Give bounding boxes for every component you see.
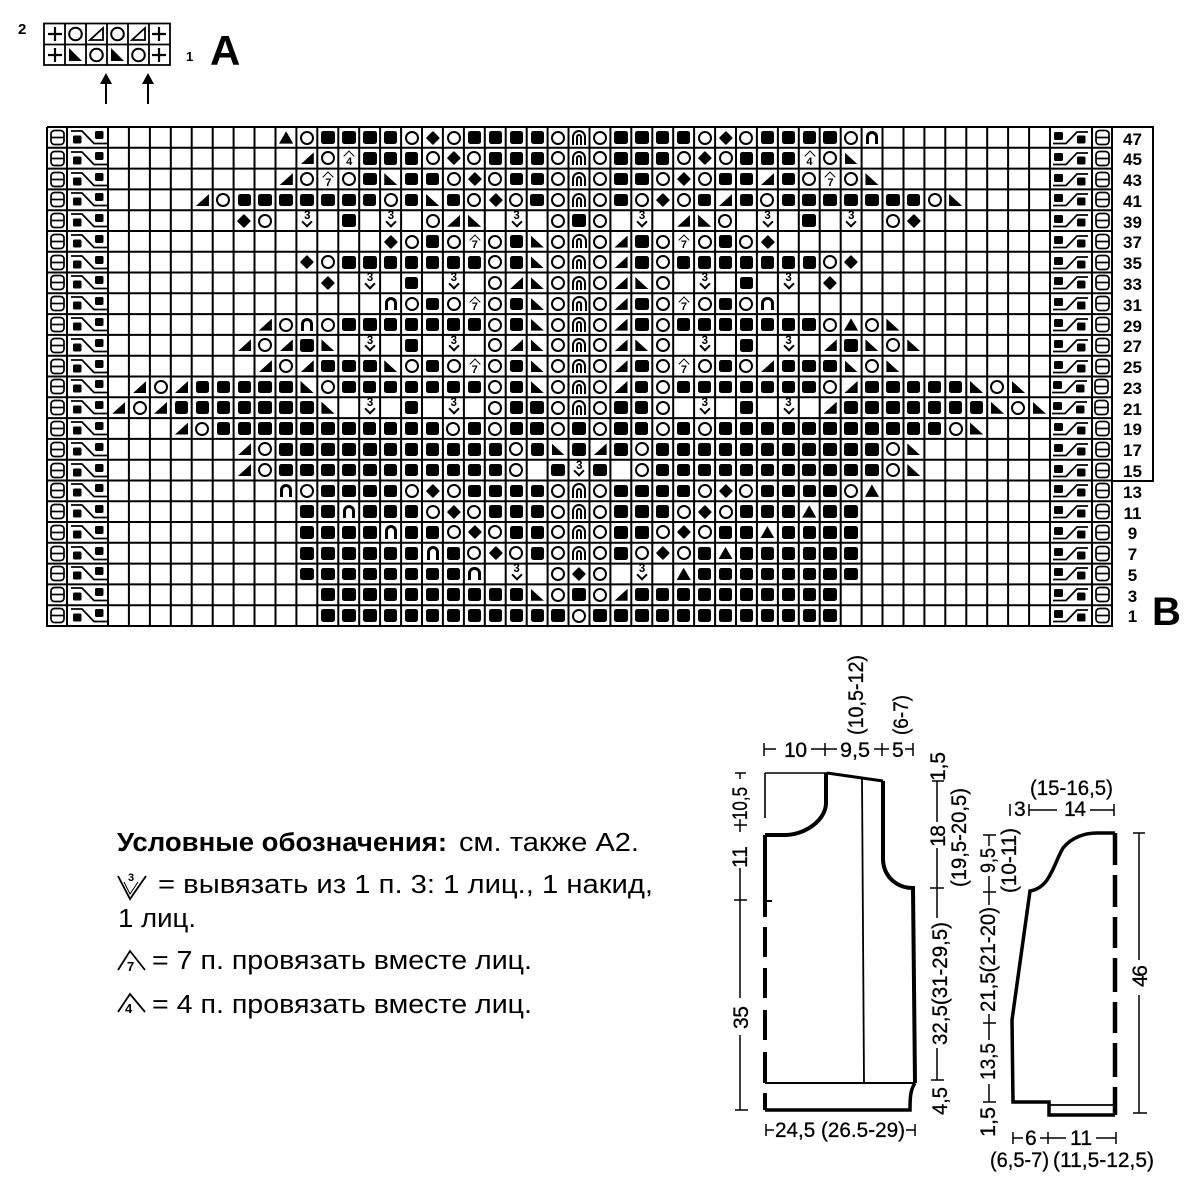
sleeve outline bbox=[1012, 833, 1115, 1115]
row 45: 4 bbox=[346, 156, 352, 168]
row 37: 7 bbox=[472, 239, 478, 251]
body dimension labels: 10,5 bbox=[729, 787, 752, 820]
body dimension labels: 24,5 (26.5-29) bbox=[775, 1119, 905, 1142]
row 47 bbox=[50, 130, 1142, 148]
row 35 bbox=[50, 254, 1142, 273]
row 23 bbox=[50, 378, 1142, 398]
body dimension labels bbox=[729, 655, 971, 1142]
row 31: 7 bbox=[681, 301, 687, 313]
row 45: 45 bbox=[1123, 150, 1142, 169]
arrow 1 bbox=[100, 73, 112, 104]
row 37: 7 bbox=[681, 239, 687, 251]
row 15: 3 bbox=[576, 460, 582, 472]
sleeve dimension labels: 3 bbox=[1014, 798, 1026, 821]
row 27: 3 bbox=[702, 335, 708, 347]
row 39: 3 bbox=[304, 210, 311, 222]
row 21 bbox=[50, 397, 1142, 419]
row 39: 3 bbox=[513, 210, 520, 222]
row 35: 35 bbox=[1123, 254, 1142, 273]
row 7: 7 bbox=[1128, 545, 1137, 564]
legend item: increase: = вывязать из 1 п. 3: 1 лиц., 1 накид, bbox=[158, 871, 653, 899]
icon: decrease 4 bbox=[118, 994, 145, 1016]
chart A symbols bbox=[48, 27, 166, 62]
body dimension labels: 11 bbox=[729, 846, 752, 868]
legend heading note: см. также А2. bbox=[459, 829, 639, 857]
sleeve dimension labels: 1,5 bbox=[977, 1107, 1000, 1137]
chart A row number 1: 1 bbox=[186, 49, 193, 64]
sleeve dimension labels: (11,5-12,5) bbox=[1053, 1149, 1154, 1172]
row 27: 3 bbox=[785, 335, 792, 347]
row 39 bbox=[50, 210, 1142, 232]
arrow 2 bbox=[142, 73, 154, 104]
row 33: 3 bbox=[451, 272, 457, 284]
sleeve dimension lines bbox=[983, 804, 1147, 1144]
row 43 bbox=[50, 171, 1142, 190]
body dimension labels: 4,5 bbox=[929, 1087, 952, 1115]
icon: decrease 7 bbox=[118, 951, 145, 974]
sleeve dimension labels: 21,5(21-20) bbox=[977, 907, 1000, 1012]
sleeve dimension labels: 14 bbox=[1064, 798, 1086, 821]
chart A: small pattern grid bbox=[18, 21, 240, 104]
sleeve dimension labels: 13,5 bbox=[977, 1043, 1000, 1080]
icon: increase 3 bbox=[118, 872, 146, 899]
chart B letter: B bbox=[1152, 590, 1181, 634]
sleeve dimension labels: 6 bbox=[1025, 1127, 1037, 1150]
row 21: 3 bbox=[367, 397, 373, 409]
sleeve dimension labels bbox=[977, 777, 1154, 1172]
row 37: 37 bbox=[1123, 233, 1142, 252]
icon: decrease 4: 4 bbox=[125, 1001, 133, 1016]
body dimension labels: (19,5-20,5) bbox=[948, 788, 971, 887]
row 31 bbox=[50, 296, 1142, 315]
body dimension labels: 32,5(31-29,5) bbox=[929, 922, 952, 1045]
chart B: symbols by row bbox=[50, 130, 1142, 626]
row 5: 3 bbox=[639, 563, 645, 575]
row 3: 3 bbox=[1128, 587, 1137, 606]
row 39: 3 bbox=[848, 210, 854, 222]
row 39: 3 bbox=[764, 210, 771, 222]
body dimension labels: 18 bbox=[927, 825, 950, 847]
row 29 bbox=[50, 316, 1142, 336]
sleeve dimension labels: (10-11) bbox=[998, 828, 1021, 893]
row 1: 1 bbox=[1128, 607, 1137, 626]
body dimension labels: 35 bbox=[730, 1006, 753, 1029]
row 21: 21 bbox=[1123, 400, 1142, 419]
row 11 bbox=[50, 504, 1141, 523]
schematic: body piece bbox=[729, 655, 971, 1142]
row 15: 15 bbox=[1123, 462, 1142, 481]
row 11: 11 bbox=[1124, 504, 1141, 523]
row 25: 25 bbox=[1123, 358, 1142, 377]
row 39: 39 bbox=[1123, 213, 1142, 232]
body dimension labels: (10,5-12) bbox=[845, 655, 868, 735]
row 41: 41 bbox=[1123, 192, 1142, 211]
row 33: 3 bbox=[702, 272, 708, 284]
row 9: 9 bbox=[1128, 524, 1137, 543]
row 3 bbox=[50, 586, 1137, 606]
body dimension labels: 10 bbox=[784, 739, 807, 762]
row 13: 13 bbox=[1123, 483, 1142, 502]
icon: increase 3: 3 bbox=[128, 872, 134, 884]
chart B: grid lines and repeat frame bbox=[46, 126, 1154, 627]
row 25: 7 bbox=[681, 364, 687, 376]
row 31: 7 bbox=[472, 301, 478, 313]
legend item: decrease 7: = 7 п. провязать вместе лиц. bbox=[152, 947, 532, 975]
sleeve dimension labels: 11 bbox=[1070, 1127, 1092, 1150]
sleeve dimension labels: (15-16,5) bbox=[1030, 777, 1113, 800]
chart A grid lines bbox=[44, 24, 170, 65]
row 31: 31 bbox=[1123, 296, 1142, 315]
row 17 bbox=[50, 441, 1142, 460]
row 37 bbox=[50, 233, 1142, 252]
chart A letter: A bbox=[210, 27, 240, 74]
row 43: 7 bbox=[325, 177, 331, 189]
body dimension labels: 1,5 bbox=[927, 752, 950, 781]
body dimension labels: 9,5 bbox=[840, 739, 870, 762]
row 19: 19 bbox=[1123, 420, 1142, 439]
legend item: increase continued: 1 лиц. bbox=[118, 905, 196, 933]
body outline bbox=[765, 773, 915, 1110]
row 19 bbox=[50, 420, 1142, 439]
body dimension labels: 5 bbox=[892, 739, 904, 762]
sleeve dimension labels: (6,5-7) bbox=[990, 1149, 1049, 1172]
body dimension labels: (6-7) bbox=[890, 695, 913, 735]
row 5: 3 bbox=[513, 563, 520, 575]
row 29: 29 bbox=[1123, 317, 1142, 336]
row 21: 3 bbox=[702, 397, 708, 409]
row 45 bbox=[50, 150, 1142, 169]
sleeve dimension labels: 9,5 bbox=[977, 848, 1000, 873]
row 43: 43 bbox=[1123, 171, 1142, 190]
row 47: 47 bbox=[1123, 130, 1142, 148]
row 41 bbox=[50, 192, 1142, 211]
row 9 bbox=[50, 524, 1137, 543]
row 7 bbox=[50, 545, 1137, 564]
legend bbox=[117, 829, 653, 1019]
row 13 bbox=[50, 482, 1142, 502]
row 17: 17 bbox=[1123, 441, 1142, 460]
row 5: 5 bbox=[1128, 566, 1137, 585]
legend heading: Условные обозначения: bbox=[117, 829, 447, 857]
legend item: decrease 4: = 4 п. провязать вместе лиц. bbox=[152, 991, 532, 1019]
row 27: 3 bbox=[451, 335, 457, 347]
row 5 bbox=[50, 563, 1137, 585]
row 33 bbox=[50, 272, 1142, 294]
row 33: 3 bbox=[367, 272, 373, 284]
row 45: 4 bbox=[806, 156, 813, 168]
row 33: 3 bbox=[785, 272, 792, 284]
row 33: 33 bbox=[1123, 275, 1142, 294]
row 27 bbox=[50, 335, 1142, 356]
row 25 bbox=[50, 358, 1142, 377]
row 39: 3 bbox=[639, 210, 645, 222]
row 43: 7 bbox=[827, 177, 833, 189]
row 25: 7 bbox=[472, 364, 478, 376]
row 27: 3 bbox=[367, 335, 373, 347]
row 21: 3 bbox=[785, 397, 792, 409]
row 1 bbox=[50, 607, 1137, 626]
row 23: 23 bbox=[1123, 379, 1142, 398]
chart A row number 2: 2 bbox=[18, 21, 26, 38]
row 21: 3 bbox=[450, 397, 457, 409]
body dimension lines bbox=[734, 743, 944, 1136]
row 39: 3 bbox=[388, 210, 394, 222]
row 27: 27 bbox=[1123, 337, 1142, 356]
row 15 bbox=[50, 460, 1142, 481]
schematic: sleeve piece bbox=[977, 777, 1154, 1172]
icon: decrease 7: 7 bbox=[127, 959, 134, 974]
sleeve dimension labels: 46 bbox=[1129, 965, 1152, 987]
